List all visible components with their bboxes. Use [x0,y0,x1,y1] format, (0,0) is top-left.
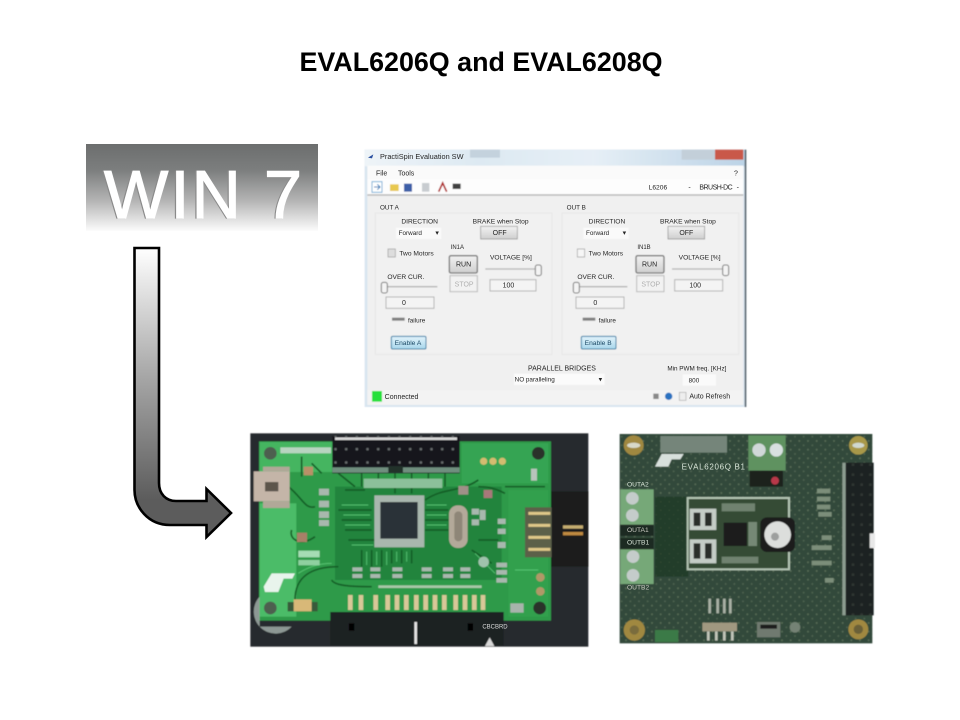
software window screenshot: PractiSpin Evaluation SW: NO paralleling [515,377,555,384]
software window screenshot: PractiSpin Evaluation SW: VOLTAGE [%] [679,255,721,262]
grey disc corner [254,597,292,634]
sliders [387,269,727,287]
board silk labels: EVAL6206Q B1 [682,462,746,471]
software window screenshot: PractiSpin Evaluation SW: 100 [689,283,701,290]
software window screenshot: PractiSpin Evaluation SW: 0 [593,300,597,307]
bottom connector [330,612,504,645]
software window screenshot: PractiSpin Evaluation SW: BRUSH-DC [699,185,733,192]
software window screenshot: PractiSpin Evaluation SW: Tools [398,171,415,178]
pads row [350,595,483,610]
board silk labels: OUTB2 [627,584,649,591]
software window screenshot: PractiSpin Evaluation SW: 0 [402,300,406,307]
bottom pin header [702,623,737,631]
window frame [365,150,745,407]
software window screenshot: PractiSpin Evaluation SW: - [737,185,740,192]
software window screenshot: PractiSpin Evaluation SW: DIRECTION [401,219,438,226]
software window screenshot: PractiSpin Evaluation SW: OUT B [567,205,586,212]
software window screenshot: PractiSpin Evaluation SW: Two Motors [589,251,624,258]
software window screenshot: PractiSpin Evaluation SW: VOLTAGE [%] [490,255,532,262]
software window screenshot: PractiSpin Evaluation SW: ▾ [623,230,627,237]
mounting screws [624,435,644,455]
20-pin top header [332,436,460,473]
enable buttons [391,336,426,349]
board silk labels: OUTA1 [627,527,649,534]
USB connector [254,471,290,501]
bottom controls [514,374,605,385]
silkscreen label and ST logo [660,436,727,453]
software window screenshot: PractiSpin Evaluation SW: OVER CUR. [387,274,424,281]
software window screenshot: PractiSpin Evaluation SW: Connected [385,394,419,401]
software window screenshot: PractiSpin Evaluation SW: PARALLEL BRIDGES [528,365,596,372]
small parts [304,467,313,475]
software window screenshot: PractiSpin Evaluation SW: Forward [399,230,422,237]
software window screenshot: PractiSpin Evaluation SW: Enable A [395,340,422,347]
software window screenshot: PractiSpin Evaluation SW: STOP [641,281,661,288]
resistor columns [319,489,507,583]
header pads top [480,458,487,465]
software window screenshot: PractiSpin Evaluation SW: Enable B [585,340,612,347]
power board photo (EVAL6206Q, dark green PCB) [620,434,875,643]
WIN 7 badge: WIN 7 [104,157,302,233]
software window screenshot: PractiSpin Evaluation SW: IN1B [637,245,651,251]
right connector [551,491,588,567]
software window screenshot: PractiSpin Evaluation SW: 800 [689,377,700,384]
window title text: PractiSpin Evaluation SW [380,152,464,161]
software window screenshot: PractiSpin Evaluation SW: Min PWM freq. [KHz] [667,365,727,372]
mounting holes [264,447,277,460]
software window screenshot: PractiSpin Evaluation SW: ▾ [599,377,603,384]
driver board photo (EVAL6208Q side, green PCB) [250,433,588,647]
number boxes [490,280,536,291]
top terminal block [748,435,786,471]
dark backdrop [250,433,588,647]
small parts right [812,489,834,583]
software window screenshot: PractiSpin Evaluation SW: BRAKE when Stop [473,219,529,226]
software window screenshot: PractiSpin Evaluation SW: failure [408,317,426,324]
left terminal blocks [620,489,654,526]
right ribbon connector [842,463,874,615]
board silk text: CBCBRD [482,625,508,631]
board silk labels [627,462,746,591]
green PCB [259,441,551,621]
software window screenshot: PractiSpin Evaluation SW: IN1A [451,245,464,251]
central outlined block [688,498,789,569]
software window screenshot: PractiSpin Evaluation SW: File [376,171,387,178]
software window screenshot: PractiSpin Evaluation SW [365,150,746,407]
silk print top-left [280,447,331,453]
MCU [374,495,424,547]
board silk labels: OUTA2 [627,482,649,489]
board silk labels: OUTB1 [627,540,649,547]
software window screenshot: PractiSpin Evaluation SW: OVER CUR. [577,274,614,281]
failure indicators [392,318,405,321]
software window screenshot: PractiSpin Evaluation SW: 100 [503,283,514,290]
software window screenshot: PractiSpin Evaluation SW: Forward [586,230,610,237]
software window screenshot: PractiSpin Evaluation SW: RUN [642,261,657,268]
software window screenshot: PractiSpin Evaluation SW: BRAKE when Stop [660,219,716,226]
corner pads right bottom [536,573,545,582]
crystal [449,505,468,548]
WIN 7 badge: WIN 7 [103,157,301,233]
title: EVAL6206Q and EVAL6208Q [300,47,662,77]
silk print strip [364,479,442,488]
PCB traces [288,457,545,600]
tantalum capacitor [288,602,318,611]
group boxes [375,213,552,354]
software window screenshot: PractiSpin Evaluation SW: Two Motors [399,251,434,258]
software window screenshot: PractiSpin Evaluation SW: - [688,185,691,192]
software window screenshot: PractiSpin Evaluation SW: ? [734,171,738,178]
software window screenshot: PractiSpin Evaluation SW: RUN [456,261,471,268]
software window screenshot: PractiSpin Evaluation SW: STOP [455,281,474,288]
software window screenshot: PractiSpin Evaluation SW: Auto Refresh [689,393,730,400]
arrow: from WIN 7 to driver board [134,248,231,537]
software window screenshot: PractiSpin Evaluation SW: OFF [493,230,507,237]
software window screenshot: PractiSpin Evaluation SW: ▾ [435,230,439,237]
ST logo [264,573,295,592]
software window screenshot: PractiSpin Evaluation SW: OUT A [380,205,400,212]
software window screenshot: PractiSpin Evaluation SW: failure [599,317,616,324]
software window screenshot: PractiSpin Evaluation SW: DIRECTION [589,219,625,226]
electrolytic capacitor [760,517,795,552]
toolbar icons [372,182,382,192]
software window screenshot: PractiSpin Evaluation SW: L6206 [649,185,667,192]
dropdowns and inputs [396,228,441,239]
software window screenshot: PractiSpin Evaluation SW: OFF [679,230,693,237]
